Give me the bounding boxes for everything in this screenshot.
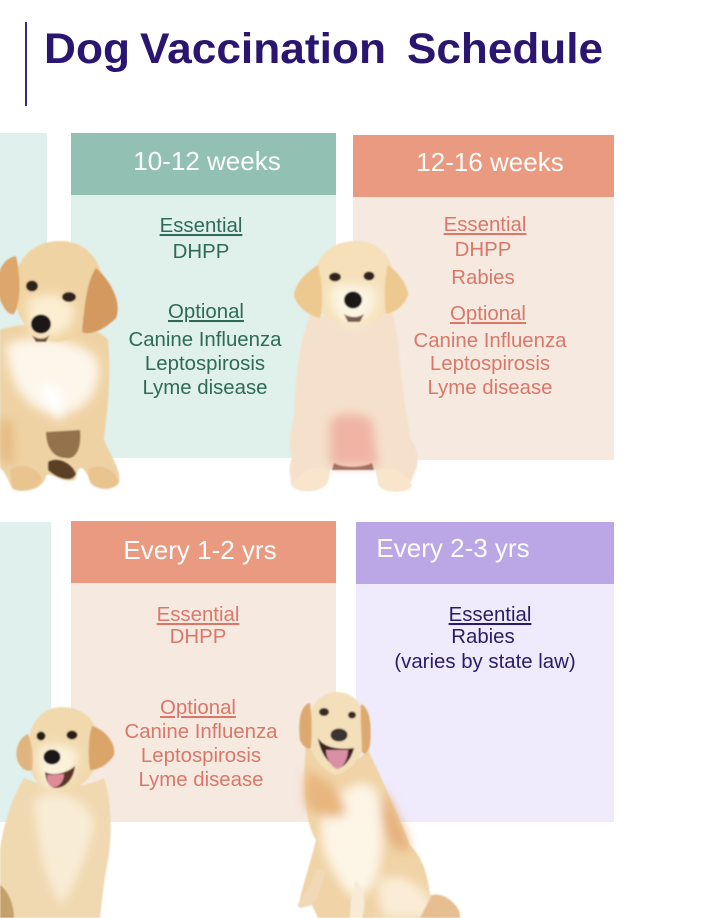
title	[25, 22, 603, 106]
essential list: Rabies	[451, 626, 515, 648]
optional list: Optional	[160, 697, 236, 719]
panel: cropped bottom-left	[0, 522, 51, 822]
optional list: Optional	[450, 303, 526, 325]
header: every 2-3 yrs	[356, 522, 614, 584]
panel: every 1-2 yrs	[71, 521, 336, 822]
essential list: Essential	[449, 604, 531, 626]
header: 10-12 weeks	[71, 133, 336, 195]
essential list	[157, 604, 239, 648]
illustration: adult golden retriever	[298, 692, 460, 918]
optional list: Leptospirosis	[145, 353, 265, 375]
header: every 2-3 yrs: Every 2-3 yrs	[376, 533, 530, 563]
panel: cropped top-left	[0, 133, 47, 458]
optional list: Lyme disease	[427, 377, 553, 399]
essential list: DHPP	[455, 239, 511, 261]
optional list: Leptospirosis	[430, 353, 550, 375]
essential list: DHPP	[173, 241, 229, 263]
optional list: Optional	[168, 301, 244, 323]
header: every 1-2 yrs: Every 1-2 yrs	[123, 535, 277, 565]
essential list: Essential	[444, 214, 526, 236]
essential list: DHPP	[170, 626, 226, 648]
essential list: Essential	[160, 215, 242, 237]
optional list	[413, 303, 567, 399]
illustration: golden puppy 3	[0, 707, 114, 918]
optional list: Lyme disease	[142, 377, 268, 399]
title text: Dog	[44, 25, 130, 73]
header: 12-16 weeks: 12-16 weeks	[416, 147, 564, 177]
title text	[44, 25, 603, 73]
optional list: Canine Influenza	[413, 330, 567, 352]
essential list	[444, 214, 526, 289]
title text: Schedule	[407, 25, 603, 73]
essential list	[394, 604, 576, 673]
essential list: Essential	[157, 604, 239, 626]
illustration: golden puppy 1	[0, 241, 119, 491]
title divider	[25, 22, 27, 106]
essential list: Rabies	[451, 267, 515, 289]
panel: 10-12 weeks	[71, 133, 336, 458]
header: 12-16 weeks	[353, 135, 614, 197]
optional list	[124, 697, 278, 791]
optional list: Canine Influenza	[128, 329, 282, 351]
header: every 1-2 yrs	[71, 521, 336, 583]
optional list: Canine Influenza	[124, 721, 278, 743]
optional list: Lyme disease	[138, 769, 264, 791]
optional list: Leptospirosis	[141, 745, 261, 767]
title text: Vaccination	[140, 25, 386, 73]
panel: 12-16 weeks	[353, 135, 614, 460]
essential list	[160, 215, 242, 263]
header: 10-12 weeks: 10-12 weeks	[133, 146, 281, 176]
optional list	[128, 301, 282, 399]
essential list: (varies by state law)	[394, 651, 576, 673]
panel: every 2-3 yrs	[356, 522, 614, 822]
illustration: golden puppy 2	[290, 241, 417, 492]
